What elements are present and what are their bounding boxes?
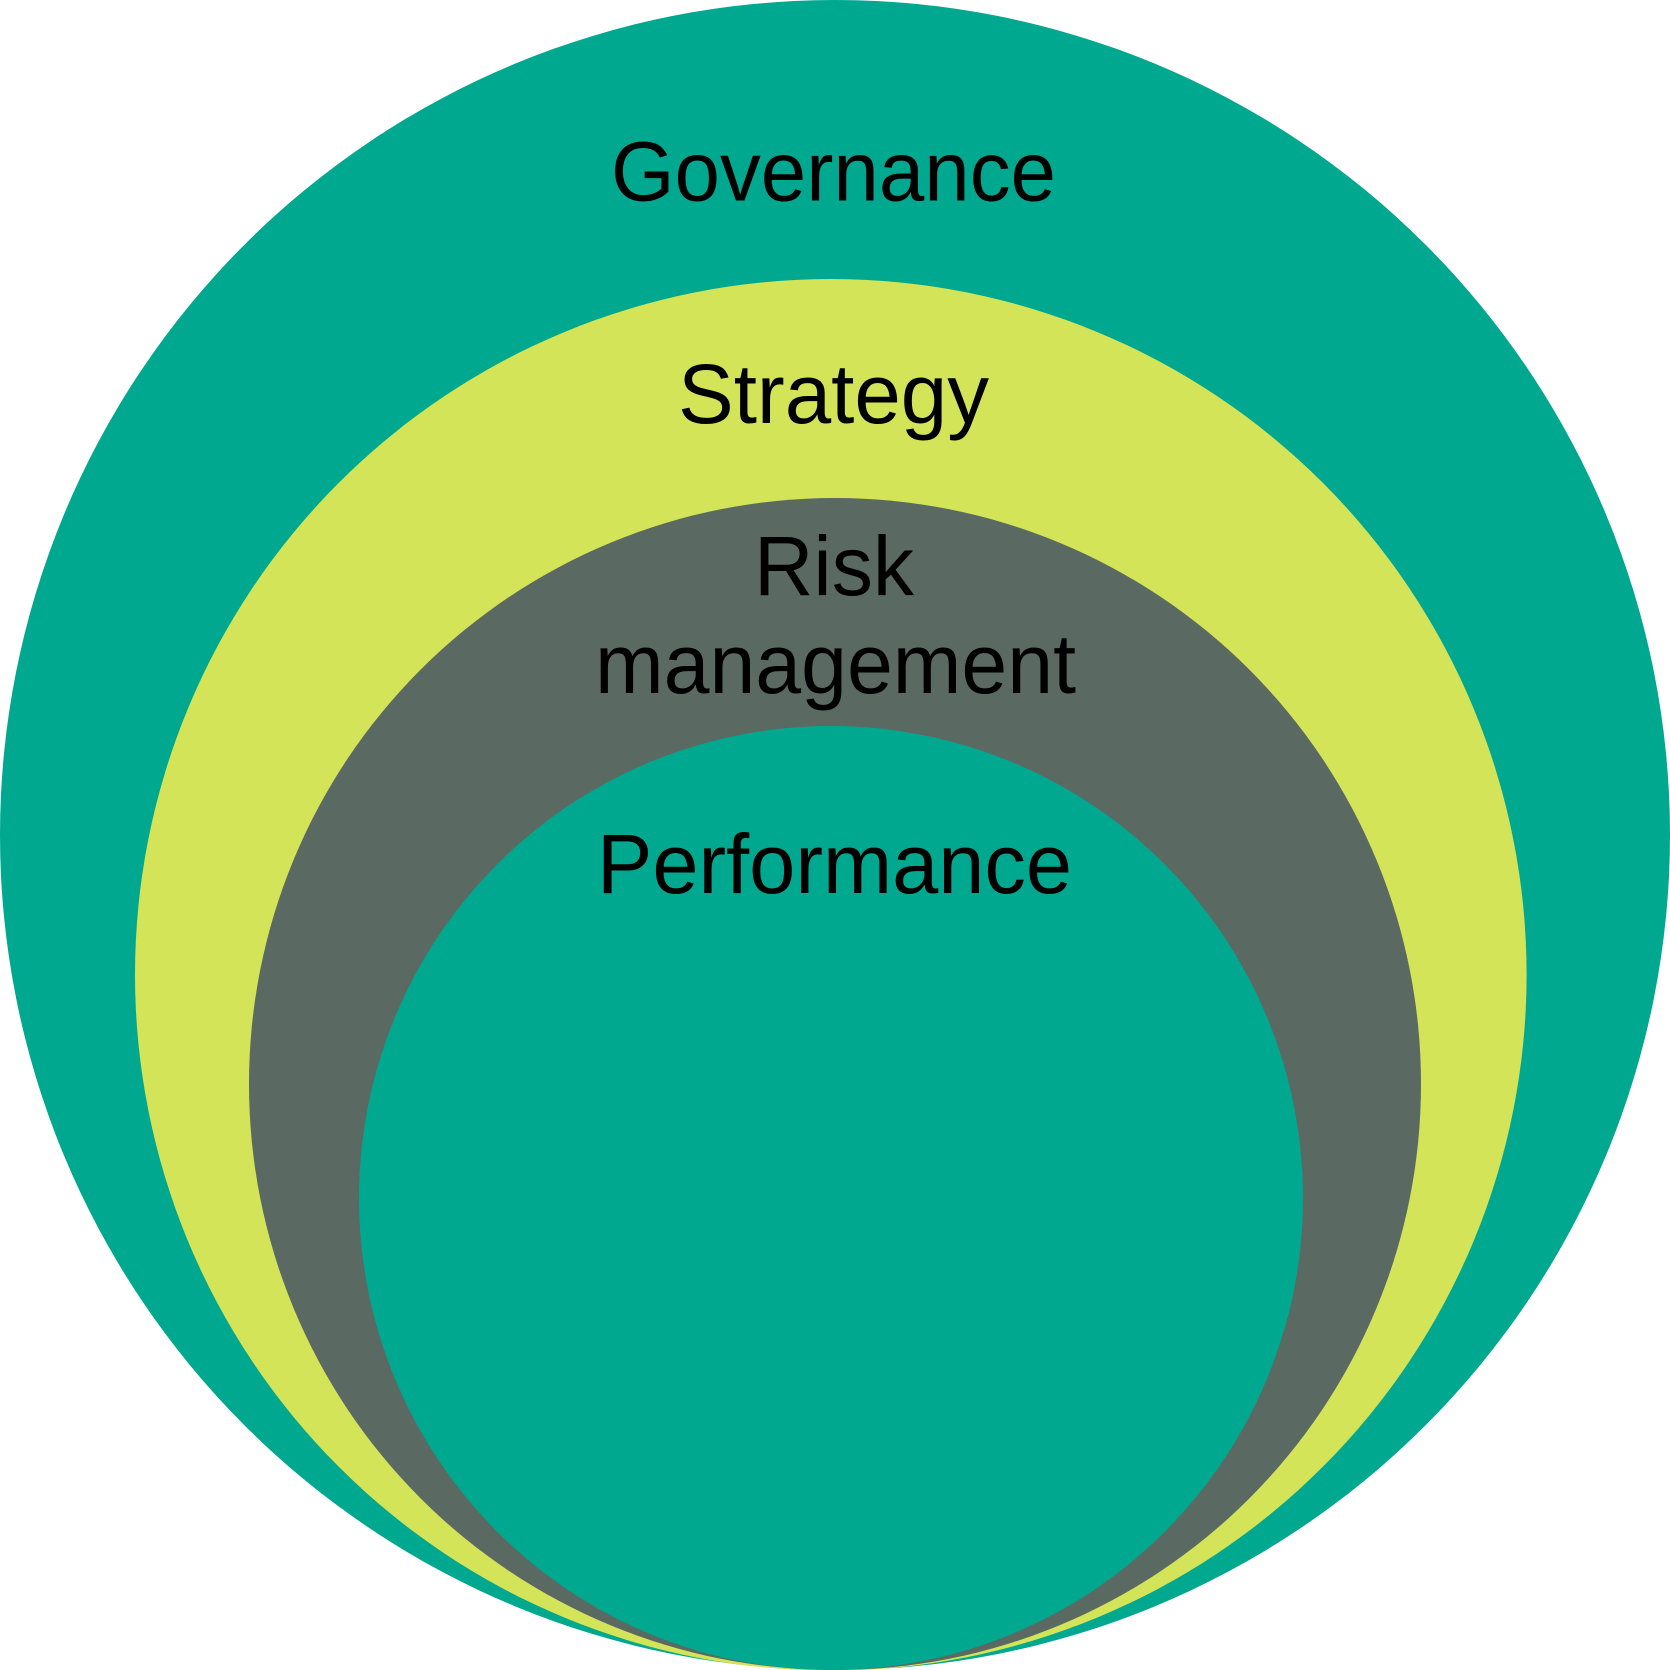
label line: risk: Risk: [754, 519, 915, 613]
label line: management: management: [595, 617, 1076, 711]
label: strategy: Strategy: [678, 347, 989, 441]
label: governance: Governance: [611, 124, 1056, 218]
circle: performance: [359, 726, 1303, 1670]
label: performance: Performance: [597, 817, 1072, 911]
circle: strategy: [135, 279, 1527, 1670]
label: risk management: [595, 519, 1076, 711]
circle: risk management: [249, 498, 1421, 1670]
